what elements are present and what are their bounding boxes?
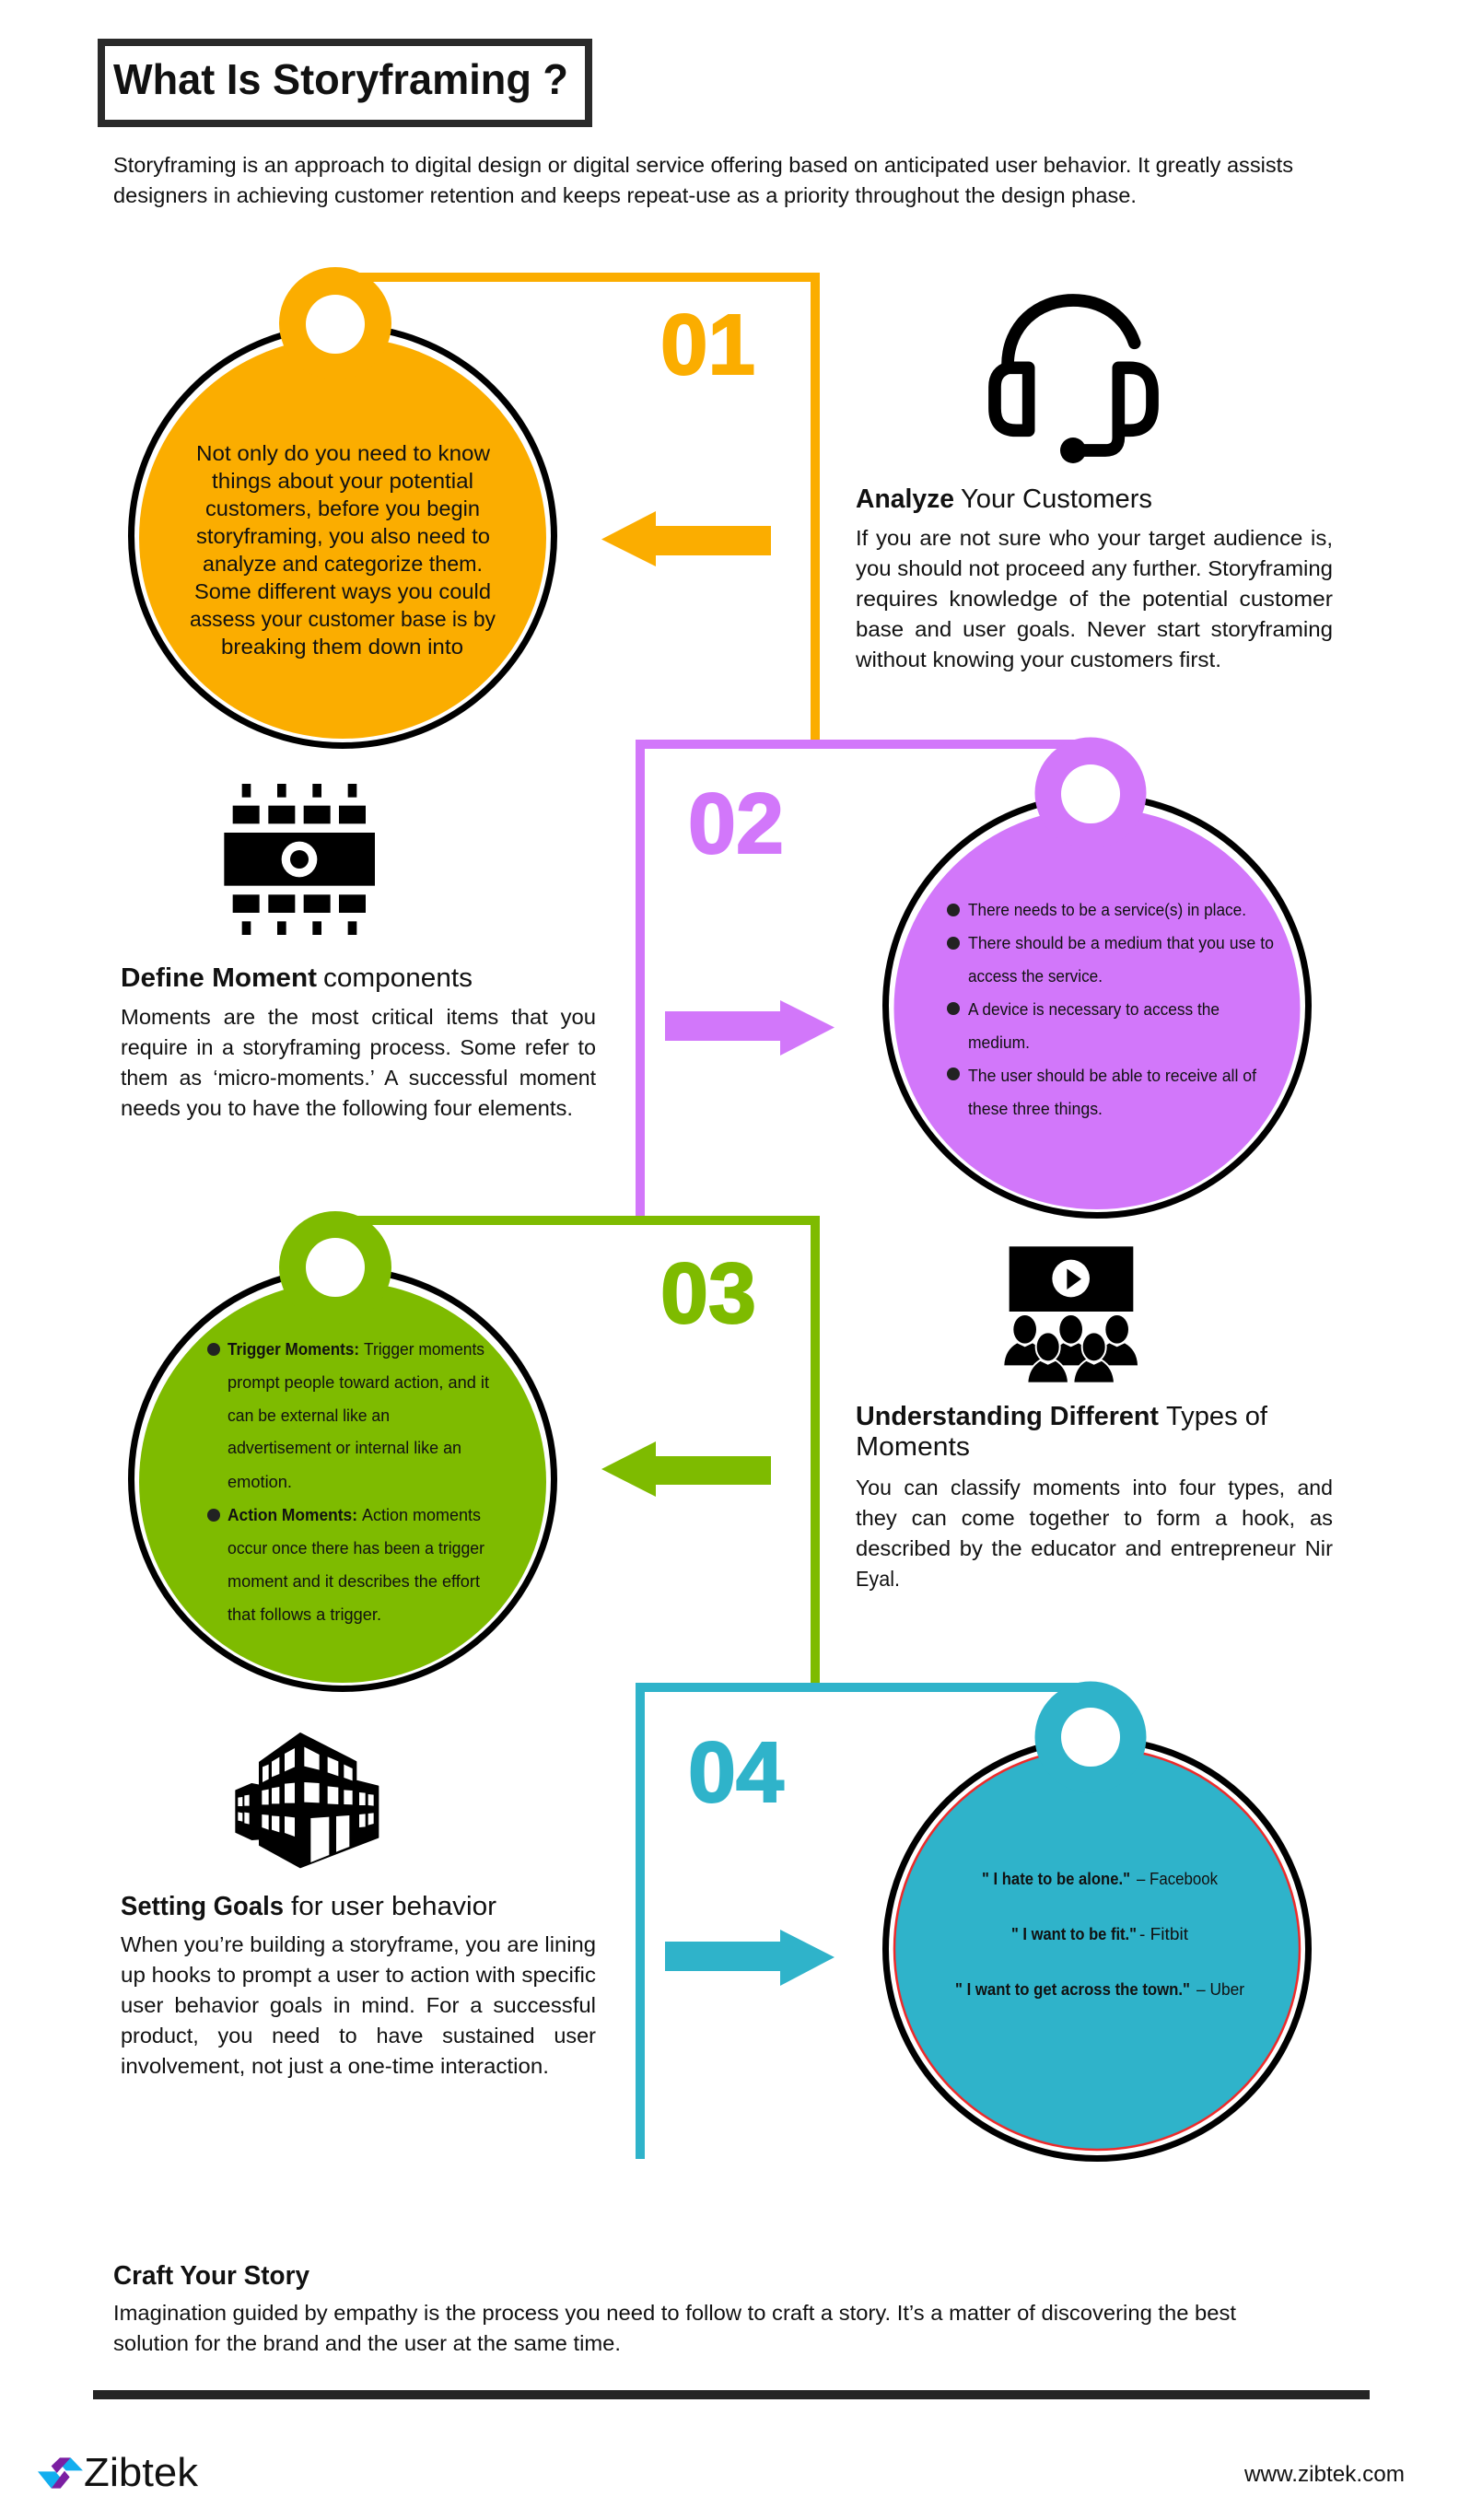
text block: setting goals xyxy=(121,1892,596,2078)
paragraph: understanding different types of moments: You can classify moments into four types, and xyxy=(856,1476,1333,1499)
knob: step 1 xyxy=(279,267,391,379)
icon: chip xyxy=(224,784,375,935)
number 01: 01 xyxy=(660,297,755,392)
arrow: step 2 xyxy=(665,1000,835,1056)
heading: analyze your customers: Your Customers xyxy=(961,484,1152,514)
connector line: orange xyxy=(335,277,815,741)
intro text: designers in achieving customer retention and keeps repeat-use as a priority throughout the design phase. xyxy=(113,183,1137,207)
bullet list: step 2: The user should be able to receive all of xyxy=(968,1066,1257,1085)
paragraph: craft your story xyxy=(113,2301,1237,2355)
circle text: step 1: breaking them down into xyxy=(221,635,463,659)
panel: step 3 circle xyxy=(131,1211,554,1689)
bullet list: step 3: Trigger moments xyxy=(364,1339,484,1359)
panel: step 1 circle xyxy=(131,267,554,746)
intro text: Storyframing is an approach to digital design or digital service offering based on anticipated user behavior. It greatly assists xyxy=(113,153,1293,177)
paragraph: setting goals: user behavior goals in mind. For a successful xyxy=(121,1993,596,2017)
quotes: step 4: - Fitbit xyxy=(1139,1924,1188,1943)
connector line: teal xyxy=(640,1687,1091,2159)
logo wordmark: Zibtek xyxy=(84,2450,199,2495)
paragraph: analyze your customers: you should not proceed any further. Storyframing xyxy=(856,556,1333,580)
closing text: craft your story xyxy=(113,2261,1237,2355)
bullet list: step 2: There should be a medium that you use to xyxy=(968,933,1274,952)
text block: define moment components xyxy=(121,963,597,1120)
bullet list: step 3 xyxy=(207,1339,489,1624)
circle text: step 1: Some different ways you could xyxy=(194,579,491,603)
website url: www.zibtek.com xyxy=(1243,2462,1405,2487)
bullet list: step 3: Action Moments: xyxy=(228,1505,357,1524)
heading: craft your story: Craft Your Story xyxy=(113,2261,309,2291)
paragraph: setting goals xyxy=(121,1932,596,2078)
quotes: step 4 xyxy=(955,1869,1244,1999)
heading: define moment components: components xyxy=(323,963,473,993)
panel: step 4 circle xyxy=(886,1682,1308,2159)
bullet list: step 2: medium. xyxy=(968,1032,1030,1052)
connector line: green xyxy=(335,1220,815,1684)
paragraph: craft your story: Imagination guided by empathy is the process you need to follow to craft a story. It’s a matter of discovering the best xyxy=(113,2301,1237,2325)
paragraph: setting goals: product, you need to have sustained user xyxy=(121,2024,596,2048)
ring: step 4 xyxy=(886,1739,1308,2159)
bullet list: step 3: emotion. xyxy=(228,1472,292,1491)
disc: step 1 xyxy=(139,337,546,739)
circle text: step 1: things about your potential xyxy=(212,469,473,493)
paragraph: analyze your customers: requires knowledge of the potential customer xyxy=(856,587,1333,611)
heading: understanding different types of moments: Understanding Different xyxy=(856,1402,1159,1431)
title xyxy=(101,42,589,123)
circle text: step 1 xyxy=(190,441,496,659)
circle text: step 1: storyframing, you also need to xyxy=(196,524,490,548)
bullet list: step 3: that follows a trigger. xyxy=(228,1604,381,1624)
number 03: 03 xyxy=(660,1245,756,1341)
bullet list: step 2: There needs to be a service(s) in place. xyxy=(968,900,1246,919)
quotes: step 4: " I want to get across the town." xyxy=(955,1979,1190,1999)
bullet list: step 2 xyxy=(947,900,1274,1118)
paragraph: define moment components xyxy=(121,1005,597,1120)
paragraph: analyze your customers: without knowing your customers first. xyxy=(855,648,1221,671)
paragraph: setting goals: up hooks to prompt a user to action with specific xyxy=(121,1963,596,1987)
paragraph: define moment components: Moments are the most critical items that you xyxy=(121,1005,596,1029)
arrow: step 1 xyxy=(601,511,771,566)
bullet list: step 3: Trigger Moments: xyxy=(228,1339,359,1359)
heading: setting goals xyxy=(121,1892,496,1921)
icon: headset xyxy=(995,300,1152,463)
ring: step 1 xyxy=(131,326,554,746)
paragraph: define moment components: them as ‘micro-moments.’ A successful moment xyxy=(121,1066,597,1090)
bullet list: step 3: prompt people toward action, and it xyxy=(228,1372,489,1392)
heading: understanding different types of moments: Moments xyxy=(856,1432,970,1462)
paragraph: understanding different types of moments: described by the educator and entrepreneur Nir xyxy=(856,1536,1333,1560)
quotes: step 4: – Facebook xyxy=(1137,1869,1219,1888)
icon: audience watching video xyxy=(1004,1246,1138,1383)
circle text: step 1: analyze and categorize them. xyxy=(203,552,483,576)
circle text: step 1: Not only do you need to know xyxy=(196,441,490,465)
disc: step 4 xyxy=(894,1748,1300,2150)
quotes: step 4: " I want to be fit." xyxy=(1011,1924,1137,1943)
paragraph: craft your story: solution for the brand and the user at the same time. xyxy=(113,2331,621,2355)
ring: step 3 xyxy=(131,1269,554,1689)
logo: Zibtek xyxy=(38,2450,199,2495)
logo mark xyxy=(38,2457,83,2489)
ring: step 2 xyxy=(886,796,1308,1216)
heading: analyze your customers xyxy=(856,484,1152,514)
paragraph: understanding different types of moments: they can come together to form a hook, as xyxy=(856,1506,1333,1530)
circle text: step 1: assess your customer base is by xyxy=(190,607,496,631)
disc: step 2 xyxy=(893,808,1301,1209)
heading: analyze your customers: Analyze xyxy=(856,484,954,514)
bullet list: step 2: these three things. xyxy=(968,1099,1103,1118)
knob: step 3 xyxy=(279,1211,391,1324)
bullet list: step 3: moment and it describes the effort xyxy=(228,1571,480,1591)
paragraph: define moment components: needs you to have the following four elements. xyxy=(121,1096,573,1120)
arrow: step 4 xyxy=(665,1930,835,1986)
bullet list: step 3: occur once there has been a trigger xyxy=(228,1538,484,1558)
disc: step 3 xyxy=(139,1281,546,1683)
intro text xyxy=(113,153,1293,207)
paragraph: setting goals: involvement, not just a one-time interaction. xyxy=(121,2054,549,2078)
heading: setting goals: Setting Goals xyxy=(121,1892,284,1921)
text block: understanding different types of moments xyxy=(856,1402,1333,1591)
paragraph: understanding different types of moments xyxy=(856,1476,1333,1591)
paragraph: analyze your customers xyxy=(855,526,1333,671)
bullet list: step 2: access the service. xyxy=(968,966,1103,986)
paragraph: analyze your customers: base and user goals. Never start storyframing xyxy=(856,617,1333,641)
bullet list: step 3: can be external like an xyxy=(228,1406,390,1425)
heading: understanding different types of moments xyxy=(856,1402,1268,1462)
bullet list: step 3: Action moments xyxy=(362,1505,481,1524)
bullet list: step 2: A device is necessary to access the xyxy=(968,999,1220,1019)
arrow: step 3 xyxy=(601,1441,771,1497)
heading: define moment components xyxy=(121,963,473,993)
number 02: 02 xyxy=(688,776,784,871)
heading: define moment components: Define Moment xyxy=(121,963,317,993)
circle text: step 1: customers, before you begin xyxy=(205,496,480,520)
divider rule xyxy=(93,2390,1370,2399)
connector line: purple xyxy=(640,744,1091,1217)
quotes: step 4: – Uber xyxy=(1196,1979,1244,1999)
bullet list: step 3: advertisement or internal like an xyxy=(228,1438,461,1457)
paragraph: setting goals: When you’re building a storyframe, you are lining xyxy=(121,1932,596,1956)
paragraph: define moment components: require in a storyframing process. Some refer to xyxy=(121,1035,596,1059)
paragraph: understanding different types of moments: Eyal. xyxy=(856,1567,900,1591)
heading: setting goals: for user behavior xyxy=(291,1892,496,1921)
text block: analyze your customers xyxy=(855,484,1333,671)
title: What Is Storyframing ? xyxy=(113,55,568,103)
heading: understanding different types of moments: Types of xyxy=(1166,1402,1268,1431)
number 04: 04 xyxy=(688,1724,784,1820)
paragraph: analyze your customers: If you are not sure who your target audience is, xyxy=(856,526,1333,550)
quotes: step 4: " I hate to be alone." xyxy=(982,1869,1130,1888)
icon: office building xyxy=(236,1733,379,1868)
knob: step 4 xyxy=(1035,1682,1146,1792)
panel: step 2 circle xyxy=(886,737,1308,1216)
knob: step 2 xyxy=(1035,737,1146,849)
